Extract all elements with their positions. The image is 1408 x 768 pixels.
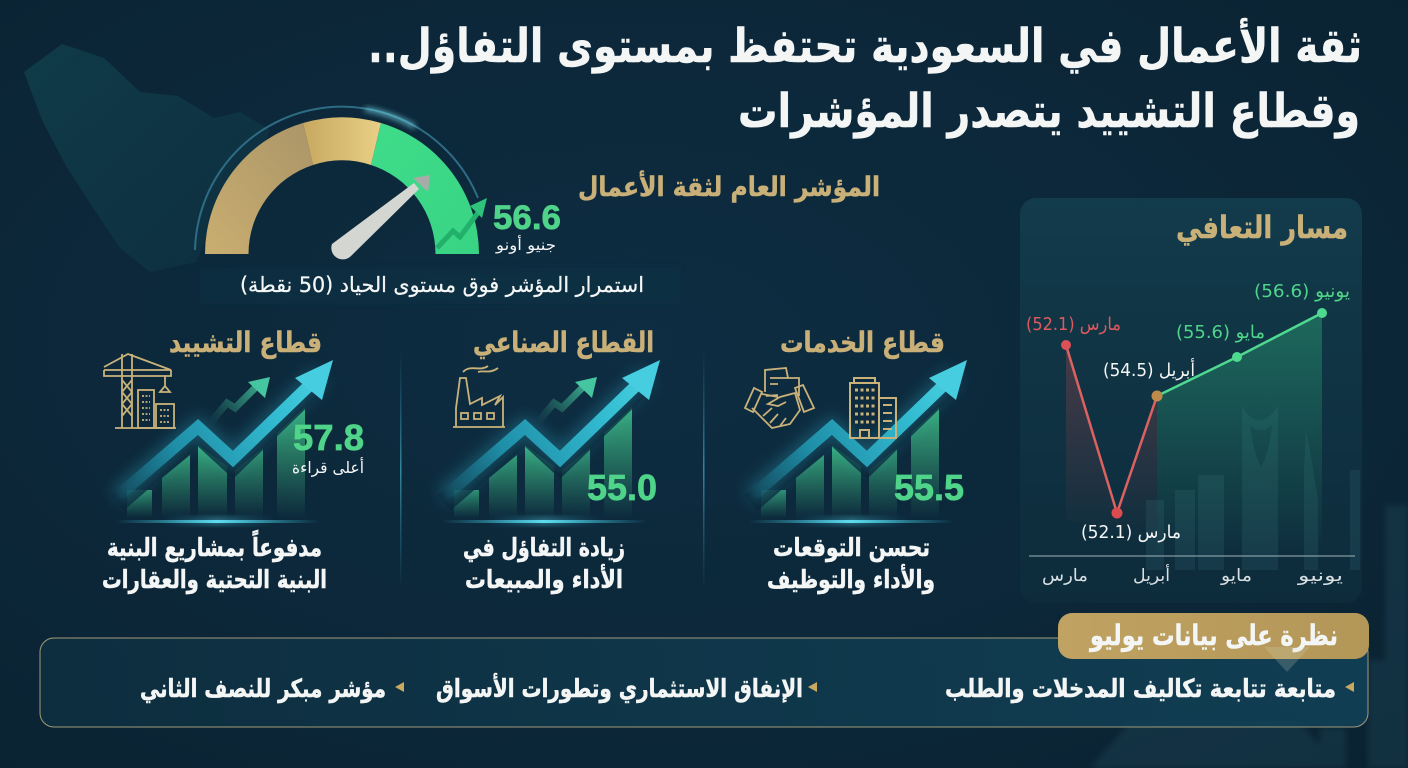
- title: [368, 17, 1362, 139]
- value: 55.0: [587, 467, 657, 508]
- pill pointer: [1264, 647, 1310, 672]
- panel: construction sector: [102, 326, 364, 595]
- icon: factory: [453, 366, 505, 427]
- sector dividers: [400, 350, 704, 590]
- heading: قطاع الخدمات: [780, 326, 945, 359]
- area red: [1066, 345, 1157, 540]
- icon: office towers: [850, 378, 896, 438]
- panel: services sector: [745, 326, 967, 595]
- gauge caption: استمرار المؤشر فوق مستوى الحياد (50 نقطة): [240, 273, 644, 297]
- description: [463, 533, 625, 595]
- line chart: [1026, 281, 1355, 586]
- growth chart: [749, 360, 967, 525]
- x axis: [1029, 555, 1355, 557]
- value: 55.5: [894, 467, 964, 508]
- heading: القطاع الصناعي: [473, 326, 654, 359]
- gauge gold segment: [303, 117, 381, 165]
- area green: [1157, 313, 1322, 556]
- green line: [1157, 313, 1322, 396]
- description: مدفوعاً بمشاريع البنية: [107, 530, 322, 563]
- panel background: [1020, 198, 1362, 603]
- panel: July data outlook: [40, 613, 1369, 727]
- pill heading: [1058, 613, 1369, 659]
- gauge caption band: [200, 268, 680, 304]
- gauge value: جنيو أونو: [495, 235, 556, 254]
- box: [40, 638, 1368, 727]
- red line: [1066, 345, 1157, 513]
- gauge: [195, 107, 487, 259]
- panel: recovery path chart: [1020, 198, 1362, 603]
- item 1: متابعة تتابعة تكاليف المدخلات والطلب: [945, 674, 1336, 704]
- gauge tan segment: [205, 123, 313, 254]
- icon: crane and buildings: [104, 354, 176, 428]
- value note: أعلى قراءة: [292, 457, 364, 478]
- index heading: المؤشر العام لثقة الأعمال: [578, 170, 880, 203]
- item 3: مؤشر مبكر للنصف الثاني: [140, 674, 386, 704]
- pill heading: نظرة على بيانات يوليو: [1088, 619, 1338, 652]
- gauge ring glow: [365, 109, 415, 127]
- growth chart: [115, 360, 333, 525]
- panel title: مسار التعافي: [1176, 210, 1348, 246]
- gauge needle: [331, 175, 430, 259]
- x axis labels: أبريل: [1133, 564, 1170, 586]
- gauge value: [493, 199, 561, 254]
- value: 57.8: [293, 417, 364, 458]
- data labels: مايو (55.6): [1176, 322, 1265, 343]
- gauge green segment: [371, 123, 479, 254]
- x axis labels: مارس: [1042, 566, 1088, 586]
- heading: قطاع التشييد: [169, 326, 322, 359]
- data points: [1061, 308, 1327, 518]
- panel skyline: [1146, 405, 1360, 570]
- x axis labels: يونيو: [1297, 566, 1343, 586]
- map of Saudi Arabia silhouette: [24, 44, 270, 272]
- x axis labels: مايو: [1220, 566, 1252, 586]
- growth chart: [442, 360, 660, 525]
- data labels: يونيو (56.6): [1254, 281, 1350, 302]
- background skyline bottom right: [1090, 505, 1408, 768]
- panel: industrial sector: [442, 326, 660, 595]
- x axis labels: [1042, 564, 1343, 586]
- description: [767, 533, 935, 595]
- icon: handshake and documents: [745, 368, 814, 428]
- trend arrow on gauge: [437, 198, 487, 248]
- data labels: أبريل (54.5): [1103, 358, 1195, 381]
- data labels: مارس (52.1): [1081, 522, 1181, 543]
- gauge outer ring: [195, 107, 478, 250]
- data labels: [1026, 281, 1350, 543]
- item 2: الإنفاق الاستثماري وتطورات الأسواق: [436, 673, 803, 704]
- description: البنية التحتية والعقارات: [102, 565, 327, 595]
- description: تحسن التوقعات: [773, 533, 930, 563]
- description: والأداء والتوظيف: [767, 564, 935, 595]
- gauge value: 56.6: [493, 199, 561, 237]
- data labels: مارس (52.1): [1026, 314, 1121, 335]
- description: الأداء والمبيعات: [465, 564, 623, 595]
- description: زيادة التفاؤل في: [463, 533, 625, 563]
- description: [102, 530, 327, 595]
